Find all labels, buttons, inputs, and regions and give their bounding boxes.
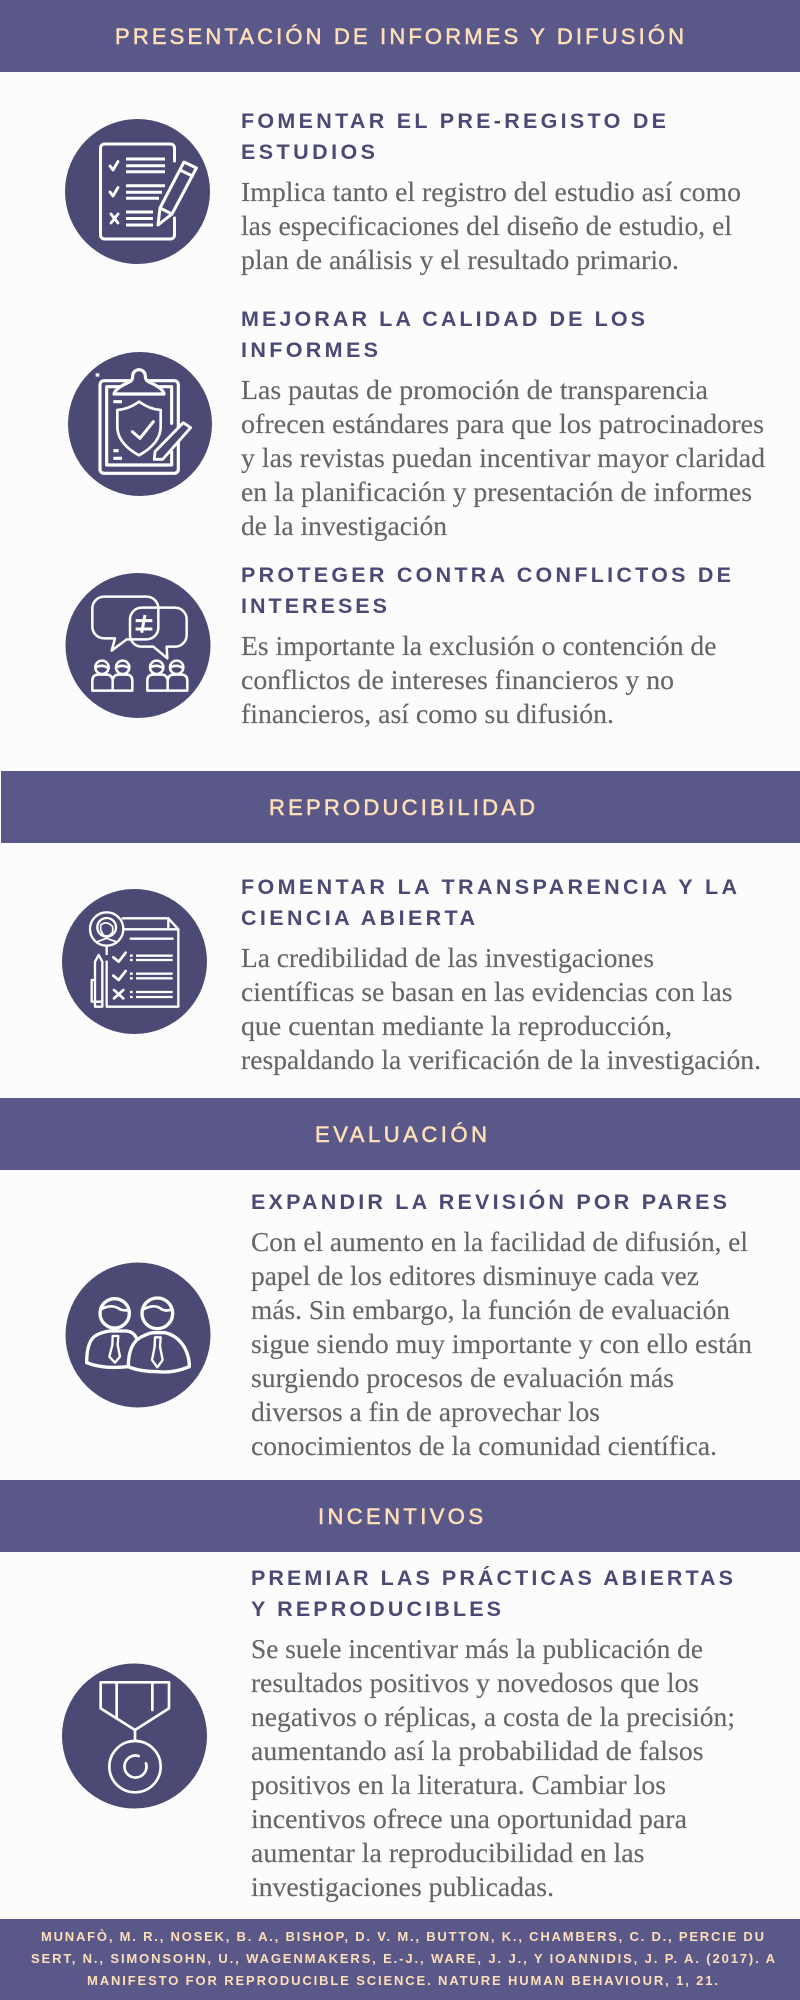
heading: Y REPRODUCIBLES [251,1597,501,1621]
heading: FOMENTAR LA TRANSPARENCIA Y LA [241,875,737,899]
heading [241,875,737,930]
heading: INTERESES [241,594,387,618]
panel: fomentar el pre-registro [65,109,741,275]
section header: presentación de informes y difusión: PRESENTACIÓN DE INFORMES Y DIFUSIÓN [115,24,684,49]
section header: presentación de informes y difusión [0,0,800,72]
body text: que cuentan mediante la reproducción, [241,1011,672,1041]
body text: respaldando la verificación de la investigación. [241,1045,761,1075]
body text: papel de los editores disminuye cada vez [251,1261,699,1291]
section header: incentivos: INCENTIVOS [318,1504,483,1529]
footer: reference: SERT, N., SIMONSOHN, U., WAGENMAKERS, E.-J., WARE, J. J., Y IOANNIDIS, J. P. A. (2017). A [31,1951,776,1966]
body text: las especificaciones del diseño de estudio, el [241,211,732,241]
body text: positivos en la literatura. Cambiar los [251,1770,666,1800]
heading: EXPANDIR LA REVISIÓN POR PARES [251,1189,727,1214]
body text: investigaciones publicadas. [251,1872,554,1902]
heading: CIENCIA ABIERTA [241,906,475,930]
panel: fomentar la transparencia [62,875,761,1075]
icon: document with magnifier and pencil [62,889,207,1034]
body text [241,375,766,541]
panel: premiar las prácticas abiertas [62,1565,735,1902]
body text [241,177,741,275]
footer: reference: MANIFESTO FOR REPRODUCIBLE SCIENCE. NATURE HUMAN BEHAVIOUR, 1, 21. [87,1973,718,1988]
body text [251,1227,753,1461]
panel: expandir la revisión por pares [66,1189,753,1461]
icon: checklist and pencil [65,119,210,264]
heading: ESTUDIOS [241,140,375,164]
body text: científicas se basan en las evidencias con las [241,977,732,1007]
body text: ofrecen estándares para que los patrocinadores [241,409,764,439]
body text: y las revistas puedan incentivar mayor claridad [241,443,766,473]
body text [241,631,717,729]
section header: evaluación: EVALUACIÓN [315,1122,487,1147]
section header: evaluación [0,1098,800,1170]
body text: Se suele incentivar más la publicación de [251,1634,703,1664]
icon: speech bubbles and people [66,573,210,718]
body text: Con el aumento en la facilidad de difusión, el [251,1227,748,1257]
icon: medal [62,1664,207,1808]
body text: Es importante la exclusión o contención de [241,631,717,661]
footer: reference [0,1919,800,2000]
section header: reproducibilidad: REPRODUCIBILIDAD [269,795,535,820]
heading: FOMENTAR EL PRE-REGISTO DE [241,109,666,133]
body text: diversos a fin de aprovechar los [251,1397,600,1427]
body text: aumentar la reproducibilidad en las [251,1838,644,1868]
body text: conflictos de intereses financieros y no [241,665,674,695]
body text: aumentando así la probabilidad de falsos [251,1736,704,1766]
body text: resultados positivos y novedosos que los [251,1668,699,1698]
heading: MEJORAR LA CALIDAD DE LOS [241,307,645,331]
heading [241,109,666,164]
body text: financieros, así como su difusión. [241,699,614,729]
body text: plan de análisis y el resultado primario. [241,245,679,275]
body text: Implica tanto el registro del estudio así como [241,177,741,207]
section header: incentivos [0,1480,800,1552]
heading: INFORMES [241,338,378,362]
body text: surgiendo procesos de evaluación más [251,1363,674,1393]
body text: en la planificación y presentación de informes [241,477,752,507]
body text: Las pautas de promoción de transparencia [241,375,708,405]
heading: PROTEGER CONTRA CONFLICTOS DE [241,563,731,587]
body text: La credibilidad de las investigaciones [241,943,654,973]
body text: de la investigación [241,511,448,541]
icon: two business people [66,1262,210,1408]
panel: proteger contra conflictos de intereses [66,563,731,729]
body text: sigue siendo muy importante y con ello están [251,1329,753,1359]
footer: reference: MUNAFÒ, M. R., NOSEK, B. A., BISHOP, D. V. M., BUTTON, K., CHAMBERS, C. D., PERCIE DU [41,1929,764,1944]
panel: mejorar la calidad de los informes [68,307,766,541]
icon: clipboard with shield [68,352,212,496]
body text: negativos o réplicas, a costa de la precisión; [251,1702,735,1732]
heading [241,563,731,618]
heading: PREMIAR LAS PRÁCTICAS ABIERTAS [251,1565,733,1590]
heading [251,1565,733,1621]
body text [241,943,761,1075]
body text: más. Sin embargo, la función de evaluación [251,1295,730,1325]
section header: reproducibilidad [1,771,800,843]
heading [241,307,645,362]
body text: conocimientos de la comunidad científica. [251,1431,717,1461]
body text: incentivos ofrece una oportunidad para [251,1804,687,1834]
body text [251,1634,735,1902]
